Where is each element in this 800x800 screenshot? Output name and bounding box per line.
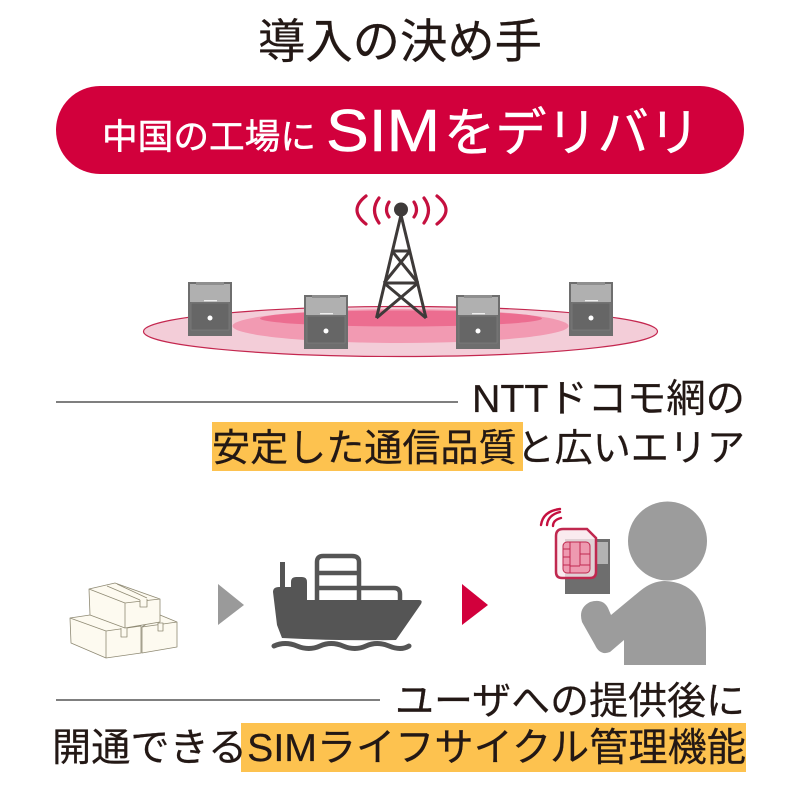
icon: user with SIM <box>541 502 707 665</box>
network coverage illustration <box>144 196 658 356</box>
banner pill: をデリバリ <box>444 105 700 163</box>
banner pill <box>56 86 744 174</box>
arrow grey <box>218 584 244 625</box>
arrow red <box>462 584 488 625</box>
tower <box>376 215 426 318</box>
caption 1 <box>56 378 745 471</box>
caption 1: 安定した通信品質と広いエリア <box>212 428 745 470</box>
icon: ship <box>273 556 422 648</box>
caption 1: NTTドコモ網の <box>472 378 745 421</box>
devices <box>188 282 232 336</box>
caption 2: 開通できるSIMライフサイクル管理機能 <box>52 727 746 770</box>
icon: boxes <box>70 583 177 658</box>
signal waves <box>357 196 446 224</box>
banner pill: SIM <box>326 98 440 164</box>
title: 導入の決め手 <box>258 15 542 68</box>
banner pill: 中国の工場に <box>102 118 316 157</box>
caption 2: ユーザへの提供後に <box>395 681 745 723</box>
caption 2 <box>52 681 746 772</box>
tower top <box>394 202 408 216</box>
